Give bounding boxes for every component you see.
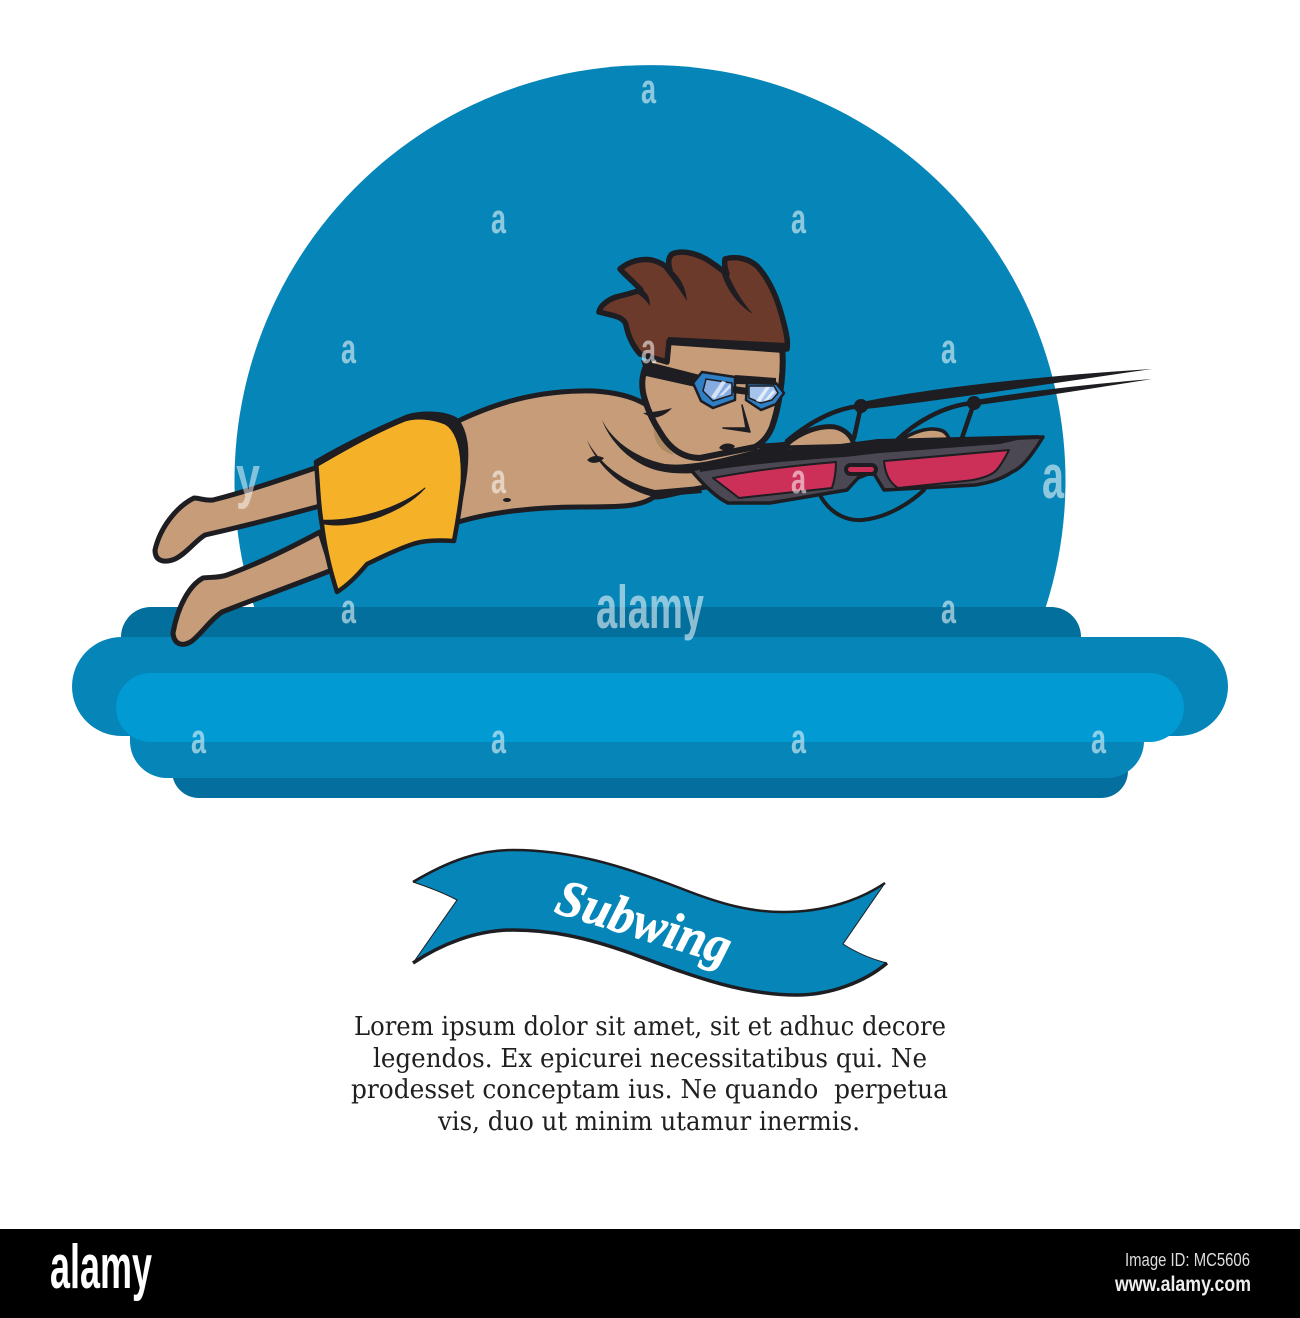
hair strands (634, 268, 753, 314)
subwing board (691, 435, 1043, 503)
knob right (967, 396, 981, 410)
watermarks: a (941, 585, 956, 632)
watermarks: a (341, 585, 356, 632)
swimmer character (155, 252, 1152, 644)
body text: Lorem ipsum dolor sit amet, sit et adhuc decore (354, 1012, 946, 1042)
upper leg (155, 467, 320, 561)
watermarks: a (791, 455, 806, 502)
ribbon title: Subwing (549, 869, 738, 976)
watermarks: a (491, 455, 506, 502)
footer url: www.alamy.com (1114, 1273, 1251, 1296)
shorts fold (320, 488, 425, 525)
watermarks (191, 65, 1106, 762)
lower leg (173, 532, 332, 644)
lower handle loop (821, 490, 924, 520)
water waves (72, 607, 1228, 798)
body text: vis, duo ut minim utamur inermis. (437, 1107, 860, 1137)
body text (351, 1012, 948, 1137)
watermarks: a (1091, 715, 1106, 762)
mouth (719, 444, 735, 451)
watermarks: a (791, 195, 806, 242)
footer bar (0, 1229, 1300, 1318)
ribbon banner (413, 850, 887, 995)
neck shadow (654, 425, 674, 455)
navel (503, 498, 511, 502)
spears (862, 369, 1152, 409)
shorts thick outline (316, 412, 468, 522)
watermarks: a (191, 715, 206, 762)
goggles (641, 360, 784, 410)
watermarks: a (641, 325, 656, 372)
far hand (890, 429, 950, 448)
nose (723, 405, 750, 432)
watermarks: a (791, 715, 806, 762)
arm crease lines (602, 420, 790, 473)
body text: prodesset conceptam ius. Ne quando perpetua (351, 1075, 948, 1105)
shorts (316, 414, 465, 592)
watermarks: alamy (596, 574, 704, 641)
torso and arm (450, 391, 860, 523)
footer logo: alamy (50, 1233, 152, 1302)
watermarks: a (491, 715, 506, 762)
hair (599, 252, 787, 362)
ropes and knobs (787, 403, 974, 442)
watermarks: y (236, 445, 260, 510)
watermarks: a (491, 195, 506, 242)
head (642, 340, 783, 458)
footer image id: Image ID: MC5606 (1125, 1250, 1250, 1270)
body text: legendos. Ex epicurei necessitatibus qui. Ne (373, 1044, 927, 1074)
ear line (643, 408, 672, 418)
knob left (854, 399, 868, 413)
hairline band (668, 338, 785, 352)
watermarks: a (941, 325, 956, 372)
watermarks: a (641, 65, 656, 112)
watermarks: a (1042, 443, 1064, 512)
watermarks: a (341, 325, 356, 372)
background circle (235, 65, 1066, 607)
